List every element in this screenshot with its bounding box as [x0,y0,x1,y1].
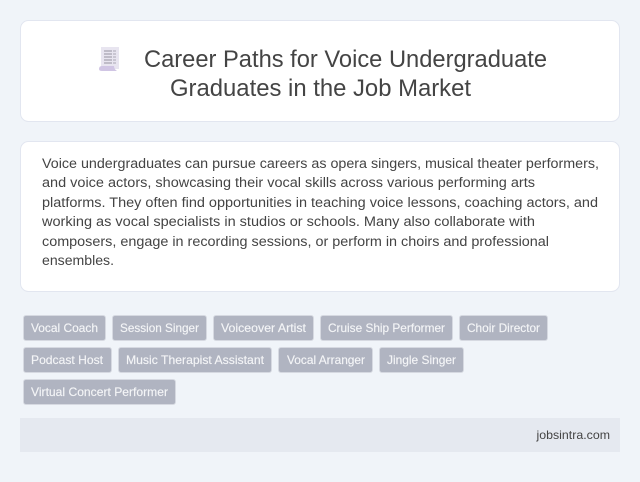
tag: Voiceover Artist [214,316,314,340]
title: Career Paths for Voice Undergraduate [144,46,547,73]
tag: Vocal Arranger: Vocal Arranger [287,353,365,367]
description text: ensembles. [42,253,114,269]
tag: Cruise Ship Performer [320,316,452,340]
tag: Vocal Coach: Vocal Coach [31,321,98,335]
icon: paper scroll [99,47,119,71]
tag: Choir Director: Choir Director [467,321,540,335]
tag: Session Singer [112,316,206,340]
tag: Virtual Concert Performer: Virtual Concert Performer [31,385,168,399]
tag: Choir Director [460,316,548,340]
tag: Jingle Singer [380,348,464,372]
footer source text: jobsintra.com [535,428,610,442]
tag: Cruise Ship Performer: Cruise Ship Performer [328,321,445,335]
tag: Vocal Arranger [278,348,372,372]
description text: working as vocal specialists in studios or schools. Many also collaborate with [41,214,535,230]
tag: Voiceover Artist: Voiceover Artist [221,321,307,335]
tag: Vocal Coach [24,316,106,340]
tag: Jingle Singer: Jingle Singer [387,353,456,367]
description text: platforms. They often find opportunities in teaching voice lessons, coaching actors, and [42,195,598,211]
panel: header card [20,20,620,122]
tag: Podcast Host [24,348,112,372]
description text: and voice actors, showcasing their vocal skills across various performing arts [42,175,535,191]
description text [41,156,599,269]
tag: Virtual Concert Performer [24,380,176,404]
tag: Podcast Host: Podcast Host [31,353,104,367]
footer bar [20,418,620,452]
tag: Music Therapist Assistant [118,348,272,372]
title: Graduates in the Job Market [170,75,471,102]
description text: composers, engage in recording sessions, or perform in choirs and professional [42,234,549,250]
description text: Voice undergraduates can pursue careers as opera singers, musical theater performers, [42,156,599,172]
panel: description card [20,142,620,292]
tag list [24,316,548,404]
title [144,46,547,102]
tag: Session Singer: Session Singer [120,321,199,335]
tag: Music Therapist Assistant: Music Therapist Assistant [126,353,265,367]
